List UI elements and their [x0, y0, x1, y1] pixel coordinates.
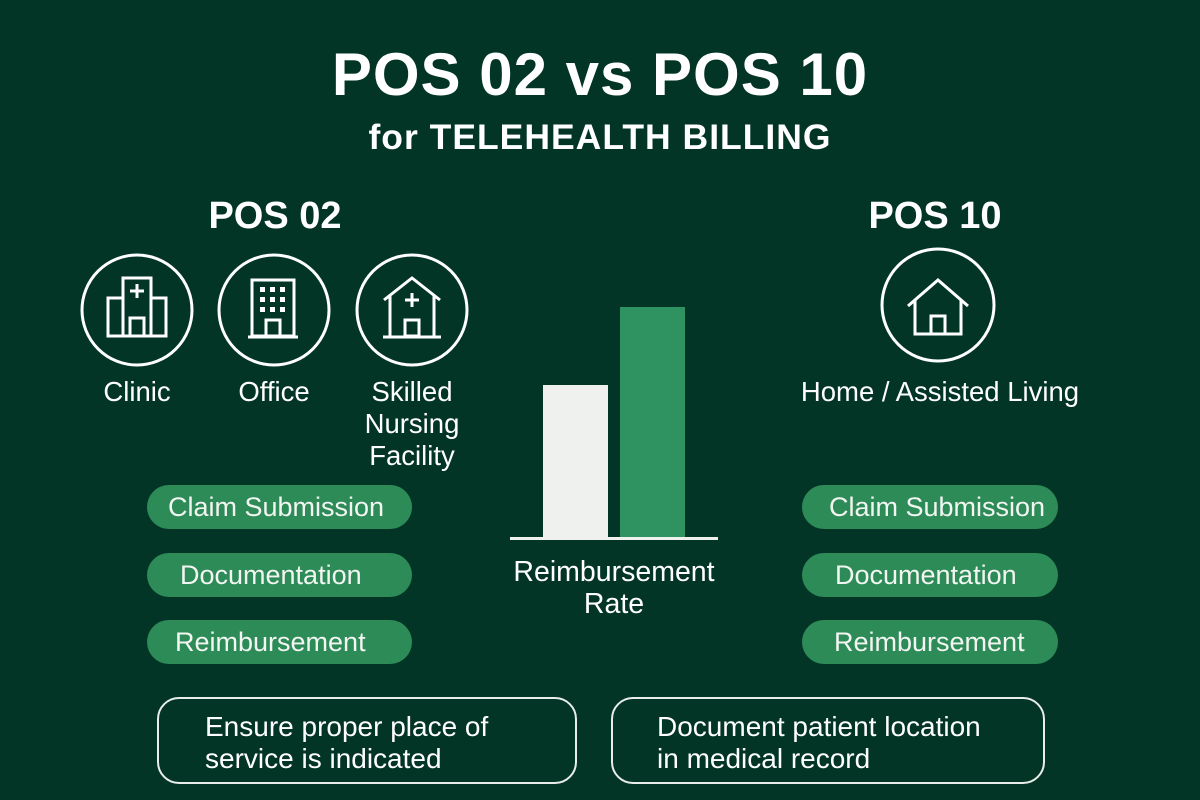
chart label: Reimbursement Rate	[513, 556, 715, 620]
heading: POS 10: POS 10	[868, 195, 1002, 237]
label: office: Office	[238, 376, 310, 407]
pills: POS 10	[802, 485, 1058, 664]
pill: documentation: Documentation	[180, 560, 362, 590]
subtitle: for TELEHEALTH BILLING	[368, 117, 832, 157]
pill: reimbursement: Reimbursement	[175, 627, 366, 657]
callout: place of service: service is indicated	[205, 743, 442, 774]
pill: reimbursement	[147, 620, 412, 664]
callout: place of service: Ensure proper place of	[205, 711, 488, 742]
callout: patient location: in medical record	[657, 743, 870, 774]
icon: clinic	[82, 255, 192, 365]
pill: documentation	[802, 553, 1058, 597]
pill: reimbursement	[802, 620, 1058, 664]
pill: reimbursement: Reimbursement	[834, 627, 1025, 657]
icon: skilled nursing facility	[357, 255, 467, 365]
callout: patient location: Document patient location	[657, 711, 981, 742]
label: home / assisted living: Home / Assisted Living	[801, 376, 1079, 407]
pill: documentation: Documentation	[835, 560, 1017, 590]
pill: documentation	[147, 553, 412, 597]
pills: POS 02	[147, 485, 412, 664]
pill: claim submission: Claim Submission	[829, 492, 1045, 522]
bar chart	[510, 307, 718, 540]
callout: place of service	[157, 697, 577, 784]
title: POS 02 vs POS 10	[332, 41, 868, 108]
label: skilled nursing facility: Skilled Nursing Facility	[365, 376, 459, 471]
callout: patient location	[611, 697, 1045, 784]
label: clinic: Clinic	[103, 376, 171, 407]
pill: claim submission	[802, 485, 1058, 529]
heading: POS 02: POS 02	[208, 195, 342, 237]
icon: home	[882, 249, 994, 361]
pill: claim submission	[147, 485, 412, 529]
icon: office	[219, 255, 329, 365]
pill: claim submission: Claim Submission	[168, 492, 384, 522]
